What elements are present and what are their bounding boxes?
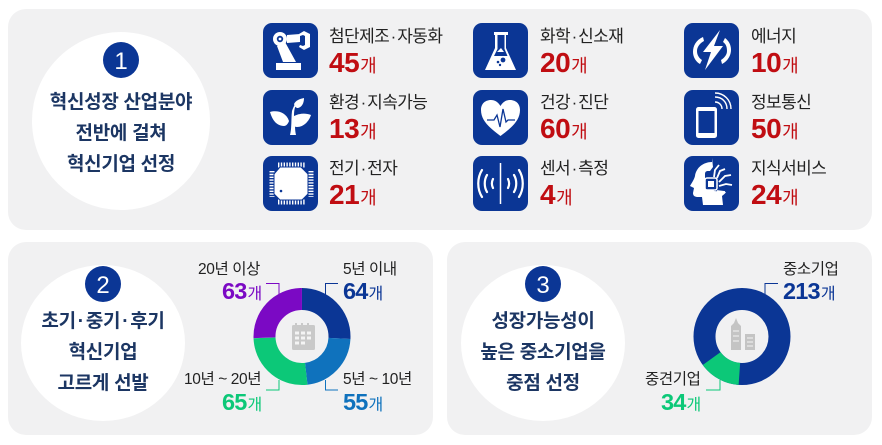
item: knowledge service [684,156,826,211]
heading circle 1 [32,32,210,210]
heading circle 3: 성장가능성이 [491,310,595,332]
panel: company size [447,242,872,435]
item: sensor: 센서·측정 [540,159,608,178]
item: electronics: 전기·전자 [329,159,398,178]
leader lines: company size [706,284,778,390]
heading circle 1: 1 [114,48,128,75]
label: 5 to 10 years: 55개 [343,389,383,415]
label: 20 years or more [198,260,262,304]
item: knowledge service: 24개 [751,179,797,210]
item: advanced manufacturing [263,23,443,78]
label: within 5 years: 5년 이내 [343,260,397,278]
donut chart: company size [702,296,782,377]
label: 5 to 10 years [343,370,412,415]
item: health: 60개 [540,113,586,144]
heading circle 3 [461,265,625,421]
heading circle 2 [21,265,185,421]
label: 5 to 10 years: 5년 ~ 10년 [343,370,412,388]
heading circle 2: 혁신기업 [69,341,137,363]
label: within 5 years [343,260,397,304]
heading circle 1: 혁신성장 산업분야 [50,91,192,113]
icon: calendar [292,323,315,350]
heading circle 2: 고르게 선발 [58,372,148,394]
panel: company age [8,242,433,435]
item: environment [263,90,427,145]
label: 10 to 20 years: 65개 [222,389,262,415]
item: chemistry [473,23,623,78]
heading circle 3: 3 [536,272,550,299]
label: within 5 years: 64개 [343,278,383,304]
item: chemistry: 화학·신소재 [540,27,623,46]
label: mid-sized companies: 34개 [661,389,701,415]
leader lines: company age [266,284,338,390]
panel: industry fields [8,9,872,230]
label: SMEs [783,260,838,304]
item: electronics: 21개 [329,179,375,210]
heading circle 1: 혁신기업 선정 [67,153,175,175]
label: mid-sized companies [645,370,701,415]
item: environment: 13개 [329,113,375,144]
label: mid-sized companies: 중견기업 [645,370,700,388]
item: ICT: 정보통신 [751,93,811,112]
item: ICT: 50개 [751,113,797,144]
item: chemistry: 20개 [540,47,586,78]
label: 20 years or more: 20년 이상 [198,260,260,278]
heading circle 1: 전반에 걸쳐 [76,122,166,144]
item: health [473,90,609,145]
heading circle 3: 높은 중소기업을 [480,341,606,363]
label: 10 to 20 years [184,370,262,415]
item: energy [684,23,797,78]
item: energy: 에너지 [751,27,796,46]
item: knowledge service: 지식서비스 [751,159,826,178]
item: advanced manufacturing: 첨단제조·자동화 [329,27,443,46]
item: sensor: 4개 [540,179,571,210]
label: 10 to 20 years: 10년 ~ 20년 [184,370,261,388]
label: 20 years or more: 63개 [222,278,262,304]
heading circle 3: 중점 선정 [506,372,580,394]
label: SMEs: 213개 [783,278,835,304]
donut chart: company age [260,295,344,378]
item: electronics [263,156,398,211]
heading circle 2: 2 [96,272,110,299]
item: advanced manufacturing: 45개 [329,47,375,78]
heading circle 2: 초기·중기·후기 [41,310,165,332]
item: energy: 10개 [751,47,797,78]
item: sensor [473,156,608,211]
item: health: 건강·진단 [540,93,609,112]
label: SMEs: 중소기업 [783,260,838,278]
item: ICT [684,90,811,145]
item: environment: 환경·지속가능 [329,93,427,112]
icon: buildings [731,318,755,350]
